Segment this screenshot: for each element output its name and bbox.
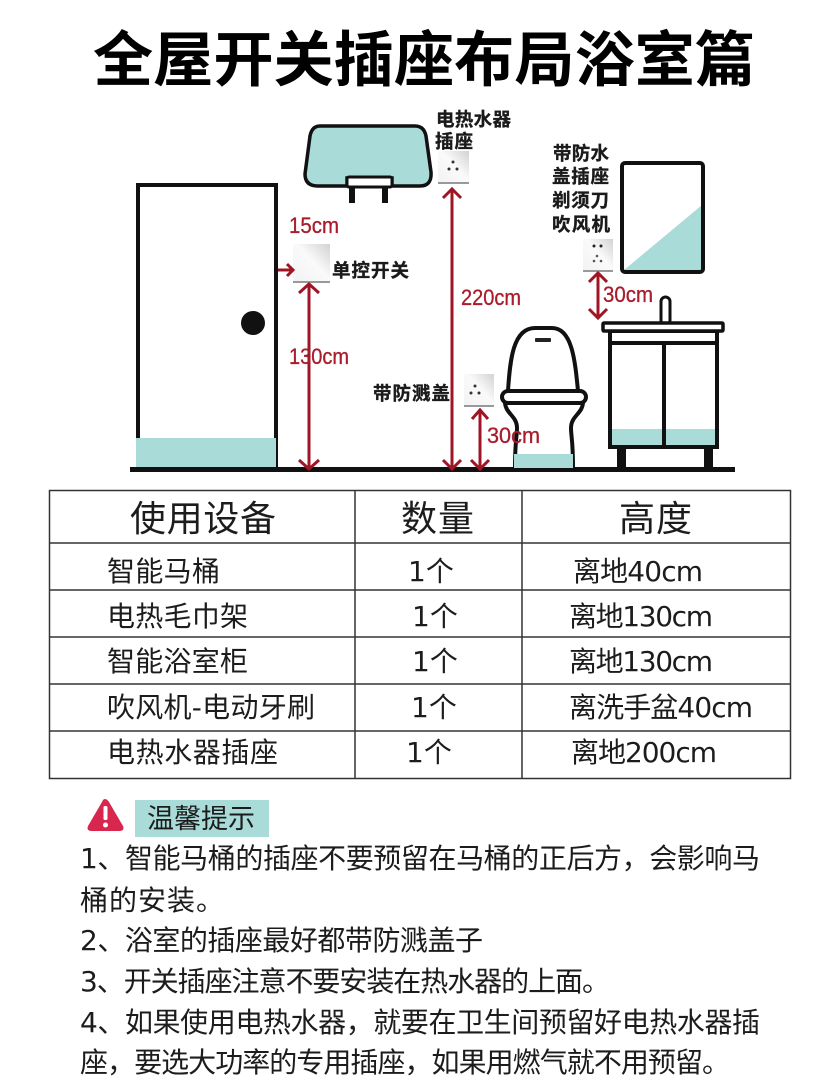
water heater <box>305 126 431 203</box>
row: water heater socket: 1个 <box>406 736 452 769</box>
table header <box>130 499 692 540</box>
table grid <box>49 490 790 778</box>
row: towel rack: 离地130cm <box>569 600 713 633</box>
water heater socket label: 插座 <box>435 131 473 152</box>
130cm label: 130cm <box>289 344 349 369</box>
water heater socket label: 电热水器 <box>436 109 511 130</box>
table header: 高度 <box>619 499 692 540</box>
single-control switch <box>293 244 330 283</box>
switch label: 单控开关 <box>332 260 409 281</box>
row: towel rack: 电热毛巾架 <box>107 600 248 633</box>
tips text: 2、浴室的插座最好都带防溅盖子 <box>80 924 483 957</box>
30cm vanity label: 30cm <box>603 282 653 307</box>
razor and hair dryer socket label: 带防水 <box>553 143 609 164</box>
door <box>136 185 276 468</box>
floor line <box>130 467 735 472</box>
220cm label: 220cm <box>461 285 521 310</box>
row: water heater socket: 离地200cm <box>571 736 717 769</box>
table header: 使用设备 <box>130 499 276 540</box>
15cm label: 15cm <box>289 213 339 238</box>
tips text: 4、如果使用电热水器，就要在卫生间预留好电热水器插 <box>80 1006 760 1039</box>
row: bathroom cabinet: 离地130cm <box>569 645 713 678</box>
table header: 数量 <box>401 499 474 540</box>
vanity cabinet <box>603 297 723 468</box>
mirror <box>622 163 703 272</box>
15cm arrow <box>278 264 293 276</box>
row: hair dryer and toothbrush <box>107 691 753 724</box>
row: towel rack <box>107 600 713 633</box>
tips text: 座，要选大功率的专用插座，如果用燃气就不用预留。 <box>80 1046 730 1079</box>
row: hair dryer and toothbrush: 1个 <box>411 691 457 724</box>
row: hair dryer and toothbrush: 吹风机-电动牙刷 <box>107 691 315 724</box>
row: smart toilet: 1个 <box>408 555 454 588</box>
row: hair dryer and toothbrush: 离洗手盆40cm <box>569 691 753 724</box>
toilet <box>502 328 586 468</box>
mirror socket <box>583 239 613 272</box>
row: water heater socket <box>107 736 717 769</box>
tips heading: 温馨提示 <box>147 804 255 835</box>
row: bathroom cabinet <box>107 645 713 678</box>
row: bathroom cabinet: 1个 <box>412 645 458 678</box>
row: smart toilet: 智能马桶 <box>107 555 220 588</box>
30cm toilet arrow <box>471 410 489 469</box>
title: 全屋开关插座布局浴室篇 <box>93 27 755 94</box>
130cm arrow <box>299 284 319 469</box>
splash-proof socket <box>464 374 494 407</box>
bathroom elevation diagram <box>130 109 735 472</box>
row: smart toilet: 离地40cm <box>573 555 703 588</box>
icon: warning triangle <box>88 799 124 831</box>
equipment table <box>49 490 790 778</box>
razor and hair dryer socket label: 剃须刀 <box>552 190 609 211</box>
30cm toilet label: 30cm <box>487 423 540 448</box>
tips text: 3、开关插座注意不要安装在热水器的上面。 <box>80 965 610 998</box>
water heater socket label <box>435 109 511 152</box>
30cm vanity arrow <box>589 273 607 318</box>
razor and hair dryer socket label: 吹风机 <box>552 214 610 235</box>
row: bathroom cabinet: 智能浴室柜 <box>107 645 248 678</box>
tips heading <box>135 800 269 837</box>
razor and hair dryer socket label <box>552 143 610 235</box>
water heater socket <box>438 151 469 184</box>
splash-proof socket label: 带防溅盖 <box>373 383 450 404</box>
row: smart toilet <box>107 555 703 588</box>
tips text <box>80 842 760 1079</box>
tips text: 1、智能马桶的插座不要预留在马桶的正后方，会影响马 <box>80 842 760 875</box>
row: water heater socket: 电热水器插座 <box>107 736 278 769</box>
tips text: 桶的安装。 <box>80 884 224 917</box>
220cm arrow <box>443 189 461 469</box>
row: towel rack: 1个 <box>412 600 458 633</box>
razor and hair dryer socket label: 盖插座 <box>552 166 609 187</box>
